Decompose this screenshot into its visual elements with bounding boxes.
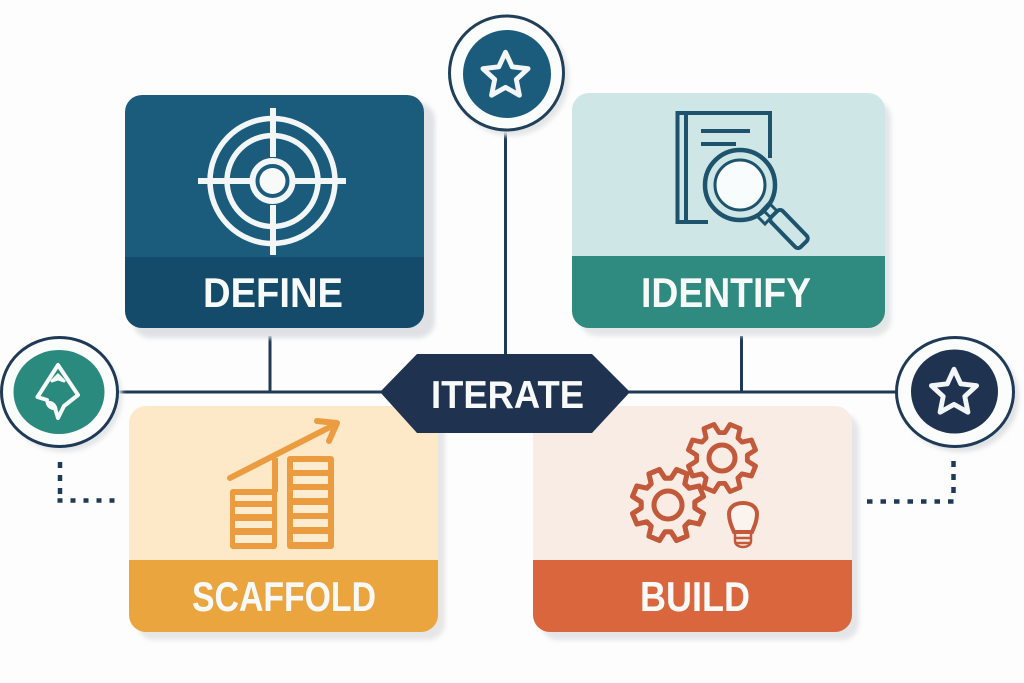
icon: target <box>198 108 346 255</box>
connector lines <box>119 127 897 392</box>
central hexagon: iterate: ITERATE <box>431 374 584 417</box>
icon: star <box>483 52 528 95</box>
icon: document and magnifier <box>678 113 809 250</box>
node: right star <box>896 338 1019 452</box>
label: identify: IDENTIFY <box>641 269 811 316</box>
icon: star <box>931 369 977 412</box>
node: left peak <box>2 338 122 452</box>
dotted connector: left <box>58 462 116 500</box>
label: scaffold: SCAFFOLD <box>192 573 376 620</box>
panel: scaffold <box>129 406 445 640</box>
dotted connector: right <box>867 461 956 502</box>
node: top star <box>450 16 569 136</box>
icon: peak with leaf <box>38 365 78 418</box>
panel: define <box>125 95 435 338</box>
label: build: BUILD <box>640 573 750 620</box>
label: define: DEFINE <box>203 269 343 316</box>
central hexagon: iterate <box>380 354 630 433</box>
panel: identify <box>572 93 891 336</box>
icon: rising bars <box>230 421 337 549</box>
panel: build <box>533 406 859 640</box>
icon: gears and bulb <box>621 413 767 552</box>
